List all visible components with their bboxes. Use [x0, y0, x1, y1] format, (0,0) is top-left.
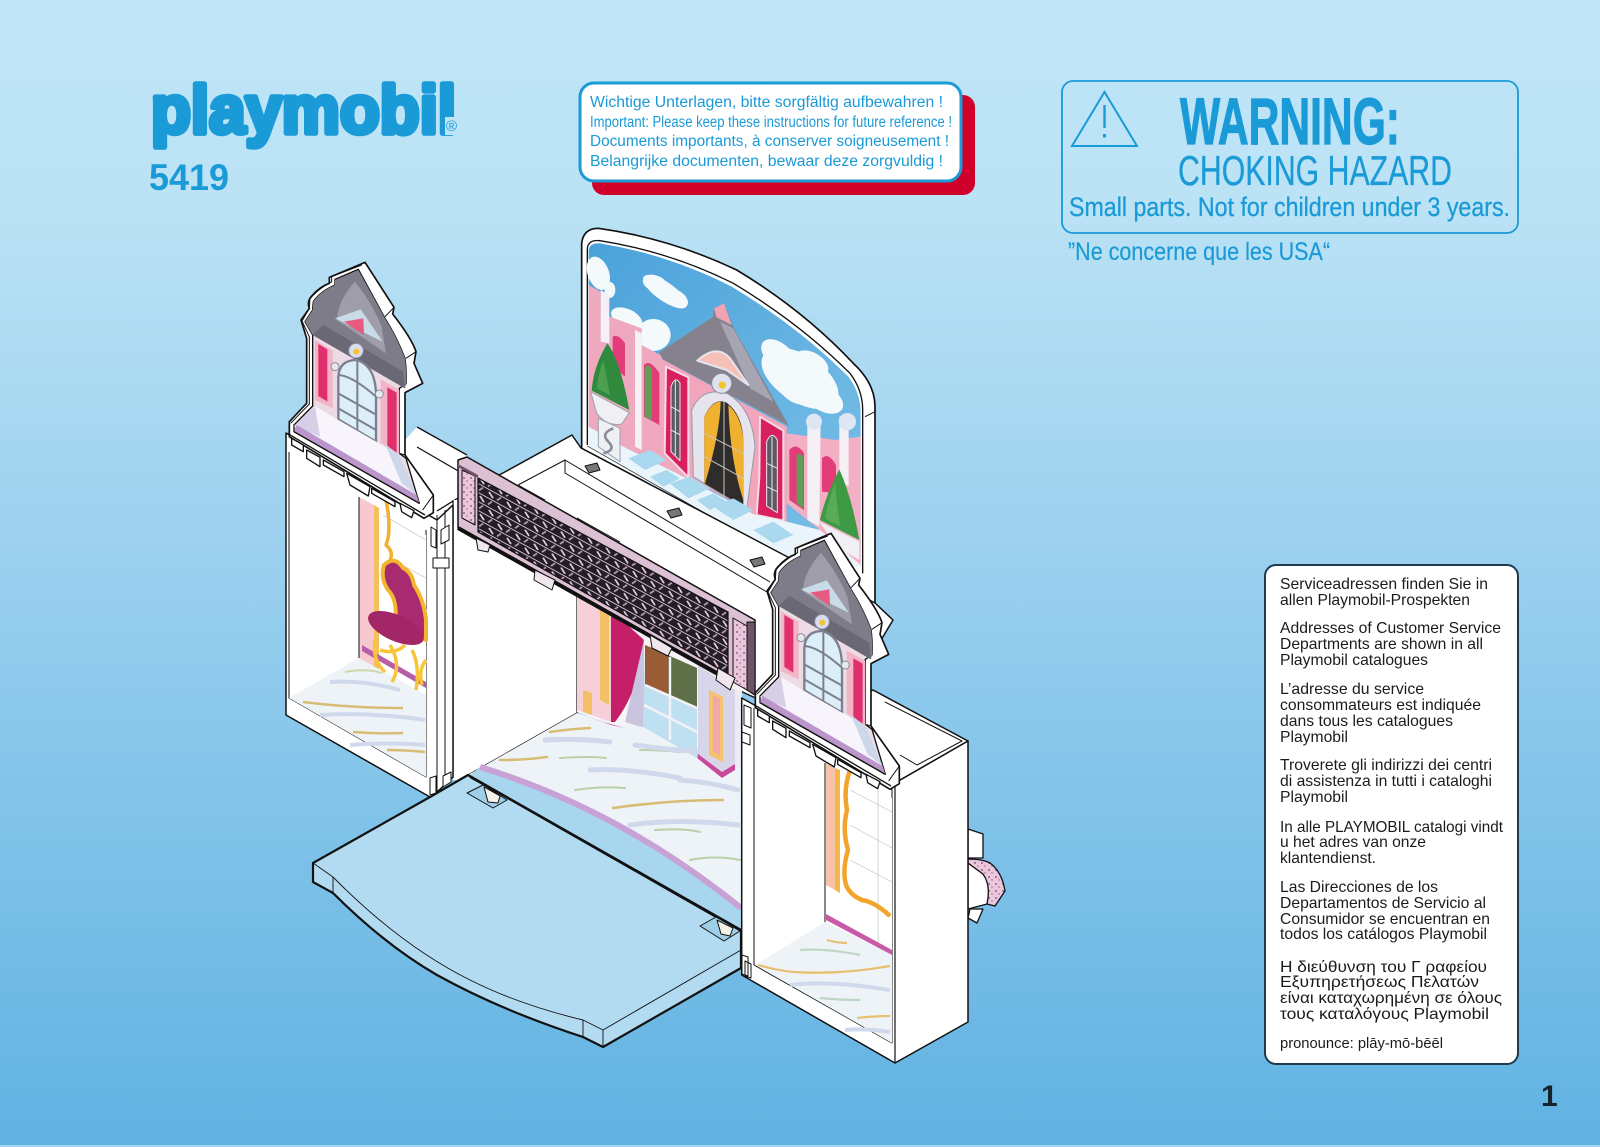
ornamental lattice header: [458, 457, 755, 695]
warning box: [1062, 81, 1518, 233]
curtain: [611, 610, 644, 722]
service address panel: Playmobil: [1280, 729, 1348, 746]
urns: [591, 392, 629, 462]
left module top surface: [405, 427, 467, 522]
service address panel: [1265, 565, 1518, 1064]
service address panel: di assistenza in tutti i cataloghi: [1280, 773, 1492, 790]
throne chair: [363, 500, 429, 690]
notice box: keep documents: Documents importants, à conserver soigneusement !: [590, 133, 949, 150]
service address panel: Addresses of Customer Service: [1280, 620, 1501, 637]
service address panel: Consumidor se encuentran en: [1280, 911, 1490, 928]
golden curtain rope: [844, 770, 890, 916]
central module body and back wall: [453, 500, 742, 780]
service address panel: todos los catálogos Playmobil: [1280, 926, 1487, 943]
playmobil logo: ®: [446, 118, 457, 135]
service address panel: u het adres van onze: [1280, 834, 1426, 851]
service address panel: In alle PLAYMOBIL catalogi vindt: [1280, 819, 1504, 836]
right hinge clips: [742, 705, 751, 978]
service address panel: Playmobil: [1280, 789, 1348, 806]
gable window: [338, 360, 376, 442]
service address panel: είναι καταχωρημένη σε όλους: [1280, 990, 1502, 1007]
playmobil logo: playmobil: [151, 72, 456, 148]
pavilion roof: [659, 303, 789, 426]
service address panel: Las Direcciones de los: [1280, 879, 1438, 896]
left module: [286, 433, 453, 797]
notice box: keep documents: Belangrijke documenten, bewaar deze zorgvuldig !: [590, 153, 943, 170]
checkered floor: [589, 427, 861, 567]
left interior back wall: [359, 497, 426, 695]
gable columns: [315, 340, 399, 455]
warning box: CHOKING HAZARD: [1178, 147, 1452, 194]
back wall pillar left: [577, 590, 611, 722]
back panel with palace garden scene: [582, 228, 875, 603]
right gable panel: [753, 533, 899, 789]
left hinge clips: [430, 525, 451, 795]
trees: [592, 343, 629, 410]
gable medallion: [349, 343, 363, 358]
notice box: keep documents: [580, 83, 975, 195]
sky: [589, 243, 861, 567]
service address panel: dans tous les catalogues: [1280, 713, 1453, 730]
central module top: [453, 435, 893, 700]
ramp hinges: [467, 785, 740, 941]
header clips: [476, 538, 735, 690]
right interior back wall: [825, 763, 892, 952]
right marble floor: [755, 922, 892, 1043]
clouds: [582, 253, 849, 422]
product number: 5419: [149, 157, 229, 198]
service address panel: consommateurs est indiquée: [1280, 697, 1481, 714]
service address panel: allen Playmobil-Prospekten: [1280, 592, 1470, 609]
left gable panel: [287, 262, 433, 518]
service address panel: Playmobil catalogues: [1280, 652, 1428, 669]
gable floor: [294, 406, 419, 503]
central marble floor: [468, 713, 742, 932]
icon: warning triangle: [1072, 92, 1137, 146]
right module: [742, 698, 968, 1063]
service address panel: τους καταλόγους Playmobil: [1280, 1006, 1489, 1023]
window: [643, 645, 697, 758]
pavilion facade: [663, 359, 787, 522]
back wall pillar right: [698, 665, 735, 778]
service address panel: Η διεύθυνση του Γ ραφείου: [1280, 959, 1487, 976]
front ramp: [313, 775, 741, 1047]
service address panel: L’adresse du service: [1280, 681, 1424, 698]
left marble floor: [289, 658, 426, 777]
right module top and side knob: [800, 690, 1005, 923]
gable roof: [305, 270, 406, 388]
light blue apron and arc: [468, 767, 741, 932]
warning box: WARNING:: [1180, 84, 1400, 158]
service address panel: pronounce: plāy-mō-bēēl: [1280, 1035, 1443, 1052]
service address panel: Troverete gli indirizzi dei centri: [1280, 757, 1492, 774]
notice box: keep documents: Wichtige Unterlagen, bitte sorgfältig aufbewahren !: [590, 94, 943, 111]
warning box: Small parts. Not for children under 3 years.: [1069, 192, 1510, 222]
service address panel: Departamentos de Servicio al: [1280, 895, 1486, 912]
notice box: keep documents: Important: Please keep these instructions for future reference !: [590, 114, 952, 131]
arched doorway: [692, 392, 755, 510]
garden walls: [589, 285, 690, 480]
medallion: [712, 373, 732, 393]
service address panel: Εξυπηρετήσεως Πελατών: [1280, 974, 1479, 991]
gable clips: [292, 438, 414, 518]
baseboard: [362, 645, 426, 688]
service address panel: Departments are shown in all: [1280, 636, 1483, 653]
service address panel: Serviceadressen finden Sie in: [1280, 576, 1488, 593]
page number: 1: [1541, 1080, 1558, 1113]
service address panel: klantendienst.: [1280, 850, 1376, 867]
USA note: ”Ne concerne que les USA“: [1068, 238, 1330, 266]
illustration: playset: [286, 228, 1005, 1063]
